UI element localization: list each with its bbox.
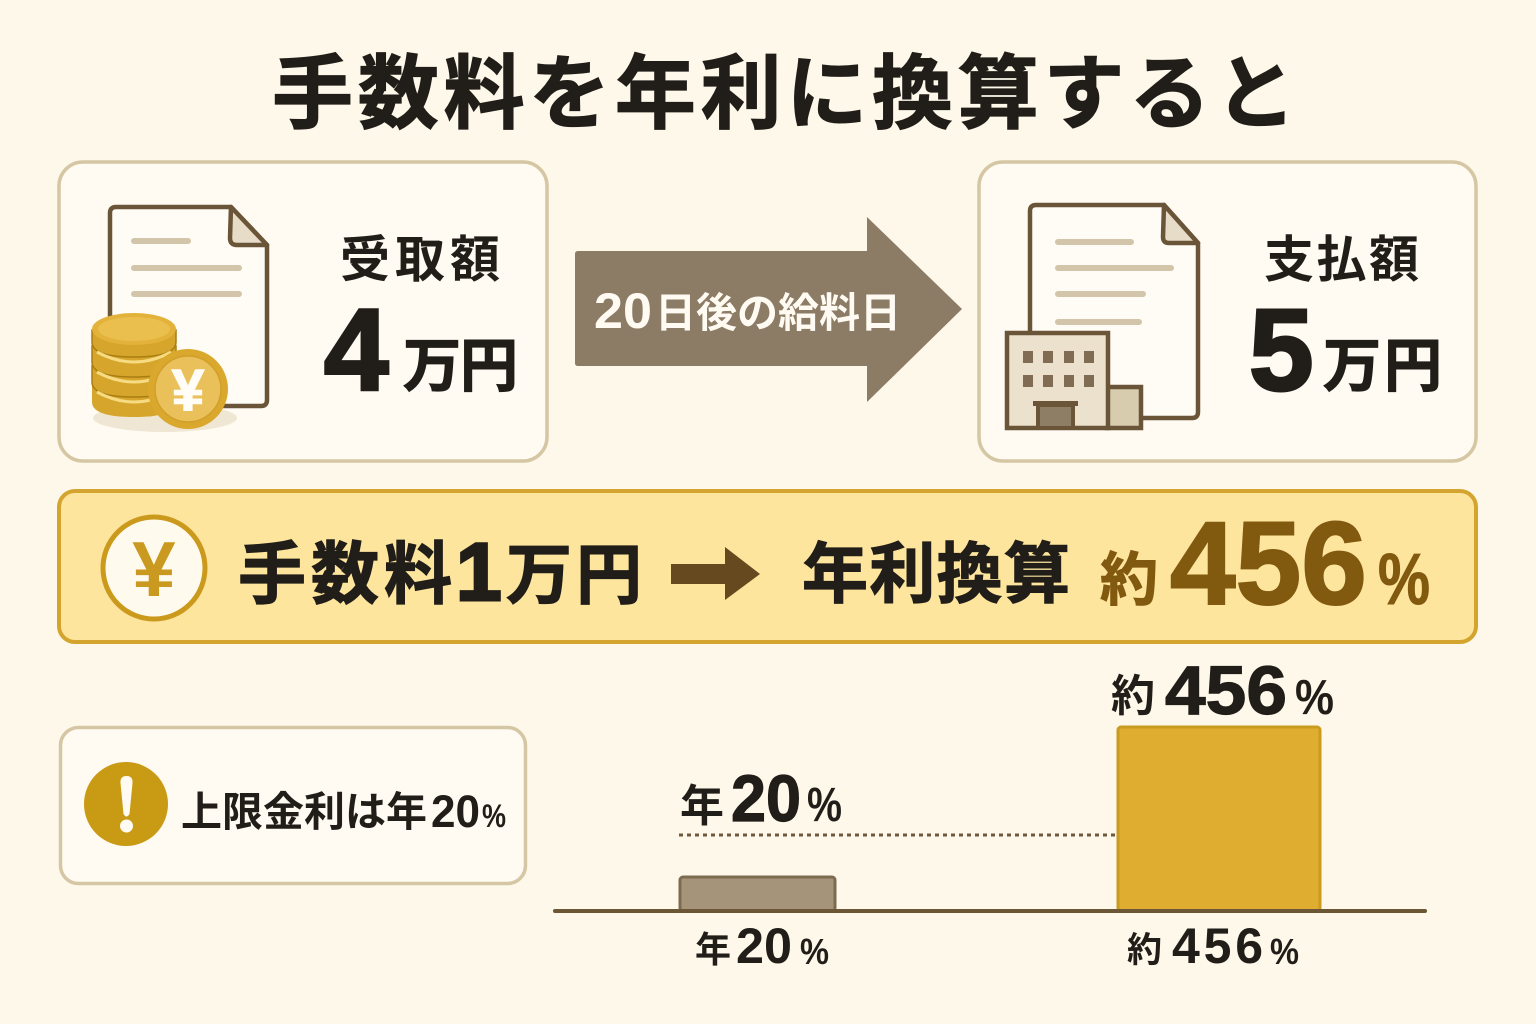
axis label 456: 456 — [1172, 918, 1263, 974]
rate value — [1100, 498, 1430, 630]
fee text: 手数料 — [238, 537, 452, 613]
callout: upper limit — [60, 728, 526, 884]
rate value: 456 — [1170, 498, 1367, 630]
icon: document with coins — [92, 207, 267, 432]
amount: 4 man yen: 万円 — [403, 334, 518, 399]
label: paid: 支払額 — [1264, 232, 1419, 288]
value label 456: % — [1295, 671, 1334, 725]
icon: yen coin — [103, 517, 205, 619]
amount: 4 man yen: 4 — [324, 285, 389, 415]
value label 456: 約 — [1111, 672, 1155, 721]
arrow: 20 days later payday: 日後の給料日 — [655, 290, 901, 336]
limit text — [181, 786, 506, 837]
axis label 456: % — [1270, 931, 1299, 972]
rate value: 約 — [1100, 548, 1158, 613]
axis — [555, 909, 1425, 913]
icon: document with building — [1007, 205, 1198, 428]
icon: document with coins: ¥ — [172, 358, 204, 423]
limit text: % — [482, 798, 506, 834]
panel: received amount — [59, 162, 547, 461]
axis label 20 — [695, 918, 829, 974]
limit label: 20 — [731, 761, 801, 835]
arrow: 20 days later payday: 20 — [594, 283, 652, 339]
bar chart — [555, 652, 1425, 974]
rate value: % — [1378, 540, 1430, 620]
panel: payment amount — [979, 162, 1476, 461]
axis label 456: 約 — [1127, 931, 1162, 970]
axis label 20: % — [800, 931, 829, 972]
limit label: % — [807, 779, 842, 832]
bar: 456 percent — [1118, 727, 1320, 911]
limit text: 上限金利は年 — [181, 789, 427, 835]
amount: 5 man yen: 5 — [1249, 285, 1314, 415]
amount: 5 man yen: 万円 — [1323, 334, 1442, 399]
amount: 4 man yen — [324, 285, 518, 415]
axis label 456 — [1127, 918, 1299, 974]
arrow — [671, 547, 760, 600]
value label 456: 456 — [1165, 652, 1287, 729]
limit text: 20 — [431, 786, 480, 837]
bar: 20 percent — [680, 877, 835, 911]
annual rate label: 年利換算 — [802, 537, 1070, 611]
fee text: 1 — [456, 527, 502, 618]
icon: yen coin: ¥ — [132, 525, 176, 613]
fee text — [238, 527, 642, 618]
amount: 5 man yen — [1249, 285, 1442, 415]
fee text: 万円 — [506, 538, 642, 612]
axis label 20: 20 — [736, 918, 792, 974]
arrow: 20 days later payday — [575, 217, 962, 402]
banner: annual rate conversion — [59, 491, 1476, 642]
icon: exclamation — [84, 762, 168, 846]
limit label — [680, 761, 842, 835]
label: received: 受取額 — [340, 232, 500, 288]
axis label 20: 年 — [695, 929, 731, 970]
value label 456 — [1111, 652, 1334, 729]
limit label: 年 — [680, 782, 724, 831]
title: 手数料を年利に換算すると — [272, 50, 1296, 140]
